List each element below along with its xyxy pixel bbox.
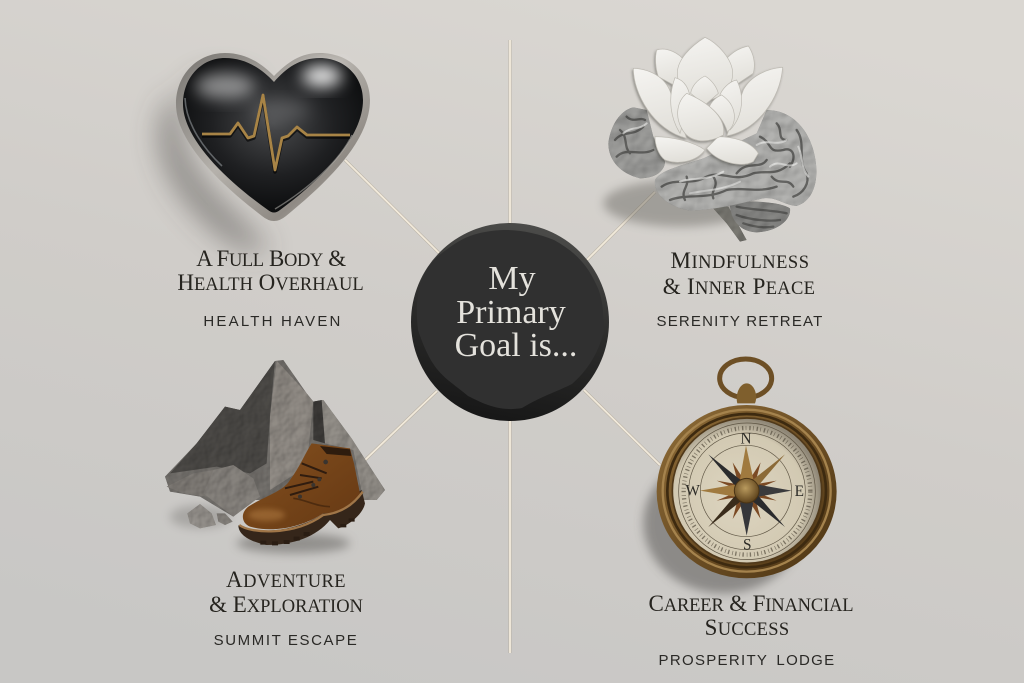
heading: Career & Financial Success: CAREER & FINANCIAL [649, 591, 853, 616]
icon: brass compass: E [795, 483, 804, 500]
subtitle: Summit Escape: SUMMIT ESCAPE [214, 632, 358, 649]
icon: brass compass: S [743, 536, 752, 553]
dial ring [679, 423, 815, 560]
panel: mindfulness [603, 37, 824, 330]
heading: A Full Body & Health Overhaul: A FULL BODY & [196, 246, 346, 271]
heading: Mindfulness & Inner Peace: & INNER PEACE [663, 274, 815, 299]
heading: Career & Financial Success [649, 591, 853, 640]
connector lines [345, 40, 660, 653]
heading: A Full Body & Health Overhaul: HEALTH OVERHAUL [177, 270, 364, 295]
icon: brass compass [643, 359, 837, 593]
heading: Adventure & Exploration: & EXPLORATION [209, 592, 363, 617]
boot [238, 443, 365, 545]
subtitle: Prosperity Lodge: PROSPERITY LODGE [659, 652, 835, 669]
compass star [700, 446, 792, 536]
panel: adventure [165, 360, 385, 649]
heartbeat line [202, 95, 350, 172]
center text: Goal is... [455, 327, 577, 364]
lotus [633, 37, 783, 164]
mountain [165, 360, 385, 528]
cardinal letters: N [740, 430, 752, 447]
heading: Mindfulness & Inner Peace: MINDFULNESS [670, 248, 810, 273]
brain [608, 107, 816, 242]
center text: My [488, 260, 536, 297]
heading: Mindfulness & Inner Peace [663, 248, 815, 299]
heading: Career & Financial Success: SUCCESS [705, 615, 789, 640]
heading: Adventure & Exploration [209, 567, 363, 617]
heading: A Full Body & Health Overhaul [177, 246, 364, 295]
subtitle: Serenity Retreat: SERENITY RETREAT [656, 313, 824, 330]
icon: brass compass: W [685, 483, 700, 500]
icon: heart with heartbeat line [160, 53, 370, 252]
panel: career [643, 359, 853, 669]
center text: Primary [456, 294, 566, 331]
panel: health [160, 53, 370, 330]
icon: lotus on brain [603, 37, 816, 242]
center slate disc [411, 223, 609, 421]
heading: Adventure & Exploration: ADVENTURE [226, 567, 346, 592]
center text [455, 260, 577, 364]
subtitle: Health Haven: HEALTH HAVEN [203, 313, 343, 330]
icon: mountain and hiking boot [165, 360, 385, 553]
